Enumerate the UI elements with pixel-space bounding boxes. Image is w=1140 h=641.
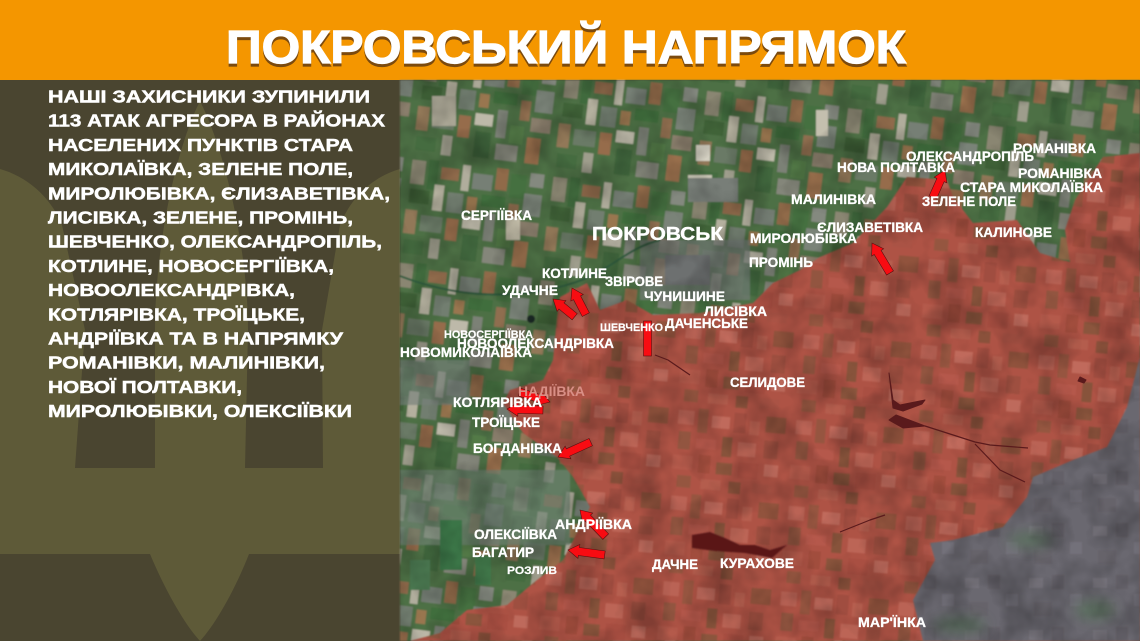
place name labels: ДАЧЕНСЬКЕ (665, 316, 748, 331)
place name labels: ШЕВЧЕНКО (600, 322, 663, 334)
place name labels: НОВА ПОЛТАВКА (837, 160, 955, 175)
place name labels: НАДІЇВКА (518, 384, 585, 399)
arrow: Kotliarivka (507, 402, 543, 417)
place name labels: РОМАНІВКА (1013, 141, 1096, 156)
place name labels: КОТЛИНЕ (542, 266, 607, 281)
summary text: КОТЛИНЕ, НОВОСЕРГІЇВКА, (48, 256, 334, 276)
place name labels: БОГДАНІВКА (473, 441, 562, 456)
place name labels: ПОКРОВСЬК (592, 223, 724, 244)
place name labels: ТРОЇЦЬКЕ (472, 415, 540, 430)
attack arrows (507, 167, 951, 562)
place name labels: ЛИСІВКА (704, 304, 767, 319)
arrow: Yelyzavetivka (866, 239, 896, 277)
ravines and rivers (655, 355, 1086, 532)
summary text: МИРОЛЮБІВКИ, ОЛЕКСІЇВКИ (48, 401, 352, 421)
place name labels: ЗЕЛЕНЕ ПОЛЕ (922, 194, 1016, 209)
place name labels: АНДРІЇВКА (555, 517, 632, 532)
summary text: ШЕВЧЕНКО, ОЛЕКСАНДРОПІЛЬ, (48, 232, 382, 252)
place name labels: ОЛЕКСІЇВКА (474, 527, 557, 542)
panel: summary with trident background (0, 80, 400, 641)
summary text: МИКОЛАЇВКА, ЗЕЛЕНЕ ПОЛЕ, (48, 159, 353, 179)
place name labels (400, 141, 1103, 630)
place name labels: СЕЛИДОВЕ (730, 375, 805, 390)
place name labels: ДАЧНЕ (652, 557, 698, 572)
arrow: Andriivka (575, 505, 611, 541)
arrow: Nadiivka (517, 385, 552, 409)
summary text: НОВООЛЕКСАНДРІВКА, (48, 280, 295, 300)
title: ПОКРОВСЬКИЙ НАПРЯМОК (226, 21, 907, 73)
place name labels: ПРОМІНЬ (749, 255, 813, 270)
arrow: Oleksiivka (567, 543, 606, 562)
panel: satellite map (400, 80, 1140, 641)
place name labels: УДАЧНЕ (502, 283, 558, 298)
trident emblem background (0, 80, 400, 641)
summary text: 113 АТАК АГРЕСОРА В РАЙОНАХ (48, 110, 385, 131)
place name labels: СТАРА МИКОЛАЇВКА (960, 180, 1103, 195)
place name labels: НОВООЛЕКСАНДРІВКА (457, 336, 614, 351)
summary text: НАШІ ЗАХИСНИКИ ЗУПИНИЛИ (48, 86, 370, 106)
place name labels: ОЛЕКСАНДРОПІЛЬ (906, 149, 1034, 164)
place name labels: ЗВІРОВЕ (605, 274, 663, 289)
arrow: Oleksandropil (926, 167, 951, 200)
arrow: Kotlyne (566, 285, 592, 318)
place name labels: СЕРГІЇВКА (461, 208, 532, 223)
natural tone variation (400, 80, 1140, 641)
place name labels: НОВОМИКОЛАЇВКА (400, 345, 532, 360)
Donetsk urban area (gray) (913, 357, 1140, 641)
place name labels: МАЛИНІВКА (791, 192, 876, 207)
green patches in urban area (934, 532, 1115, 633)
place name labels: РОЗЛИВ (507, 565, 557, 577)
place name labels: КОТЛЯРІВКА (453, 395, 542, 410)
place name labels: ЧУНИШИНЕ (644, 289, 725, 304)
summary text: АНДРІЇВКА ТА В НАПРЯМКУ (48, 328, 344, 348)
place name labels: КУРАХОВЕ (720, 556, 794, 571)
place name labels: МАР'ЇНКА (858, 615, 926, 630)
summary text: МИРОЛЮБІВКА, ЄЛИЗАВЕТІВКА, (48, 183, 390, 203)
place name labels: МИРОЛЮБІВКА (750, 231, 857, 246)
summary text: ЛИСІВКА, ЗЕЛЕНЕ, ПРОМІНЬ, (48, 208, 353, 228)
header bar (0, 0, 1140, 80)
place name labels: КАЛИНОВЕ (975, 225, 1052, 240)
arrow: Shevchenko (644, 321, 652, 356)
place name labels: БАГАТИР (472, 545, 534, 560)
summary text (48, 86, 390, 421)
Kurakhove reservoir (692, 532, 787, 558)
occupied territory (red overlay) (410, 153, 1140, 641)
arrow: Bohdanivka (555, 436, 594, 463)
summary text: НОВОЇ ПОЛТАВКИ, (48, 377, 242, 397)
place name labels: ЄЛИЗАВЕТІВКА (817, 220, 923, 235)
summary text: КОТЛЯРІВКА, ТРОЇЦЬКЕ, (48, 304, 305, 324)
place name labels: НОВОСЕРГІЇВКА (444, 328, 533, 341)
arrow: Udachne (549, 294, 579, 322)
summary text: НАСЕЛЕНИХ ПУНКТІВ СТАРА (48, 135, 353, 155)
green satellite fields (400, 80, 1140, 641)
place name labels: РОМАНІВКА (1018, 166, 1102, 181)
summary text: РОМАНІВКИ, МАЛИНІВКИ, (48, 353, 325, 373)
